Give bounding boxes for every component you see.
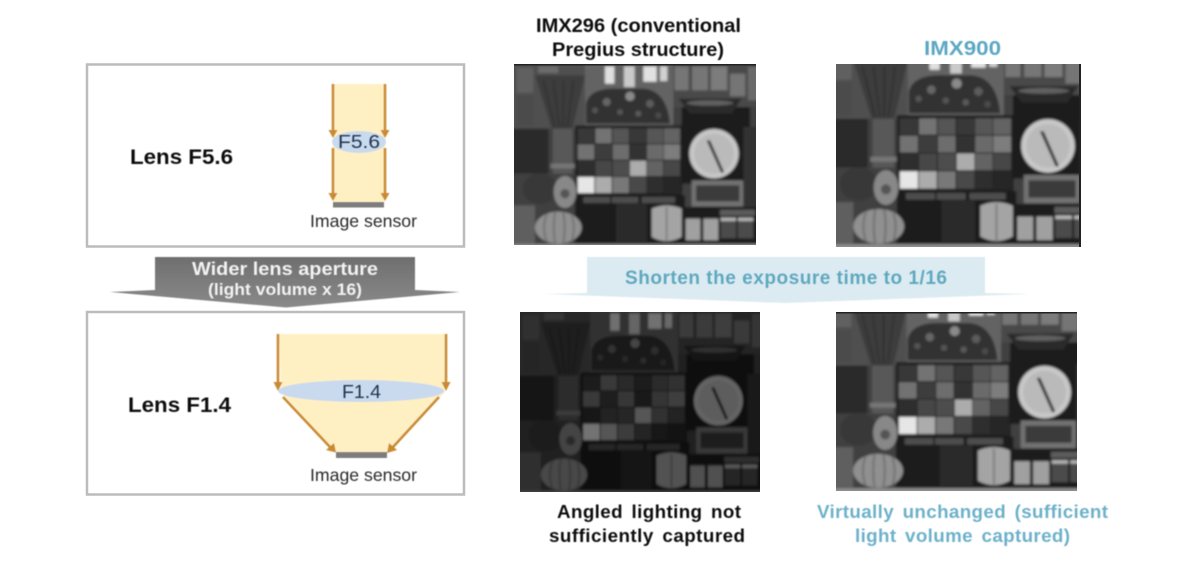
arrow text line 2: (light volume x 16)	[208, 281, 362, 299]
diagram: wide light path	[274, 334, 450, 458]
panel frame	[87, 312, 464, 494]
arrow text line 1: Wider lens aperture	[192, 259, 378, 279]
caption: virtually unchanged: Virtually unchanged (sufficient	[817, 501, 1109, 522]
caption: angled lighting: Angled lighting not	[557, 501, 742, 522]
caption: angled lighting	[549, 501, 745, 546]
caption: virtually unchanged: light volume captured)	[855, 525, 1070, 546]
panel frame	[87, 64, 464, 246]
diagram: narrow light path	[328, 84, 390, 208]
photo: IMX296 short exposure	[513, 304, 772, 501]
lens label: F5.6: F5.6	[338, 132, 380, 152]
heading: IMX296: IMX296 (conventional	[536, 15, 741, 37]
caption: angled lighting: sufficiently captured	[549, 525, 745, 546]
panel: lens F5.6	[87, 64, 464, 246]
caption: virtually unchanged	[817, 501, 1109, 546]
heading: IMX296: Pregius structure)	[552, 39, 724, 61]
sensor label: Image sensor	[310, 465, 417, 485]
sensor label: Image sensor	[310, 211, 417, 231]
heading: Lens F5.6: Lens F5.6	[130, 145, 233, 169]
panel: lens F1.4	[87, 312, 464, 494]
heading: IMX900: IMX900	[924, 38, 1001, 60]
photo: IMX900 normal exposure	[823, 41, 1107, 255]
heading: Lens F1.4: Lens F1.4	[128, 393, 231, 417]
arrow: wider lens aperture	[110, 257, 460, 308]
photo: IMX900 short exposure	[823, 289, 1103, 499]
lens label: F1.4: F1.4	[342, 382, 381, 402]
arrow: shorten exposure time	[545, 257, 1030, 303]
photo: IMX296 normal exposure	[507, 57, 768, 254]
arrow text: Shorten the exposure time to 1/16	[625, 268, 947, 289]
heading: IMX296	[536, 15, 741, 61]
